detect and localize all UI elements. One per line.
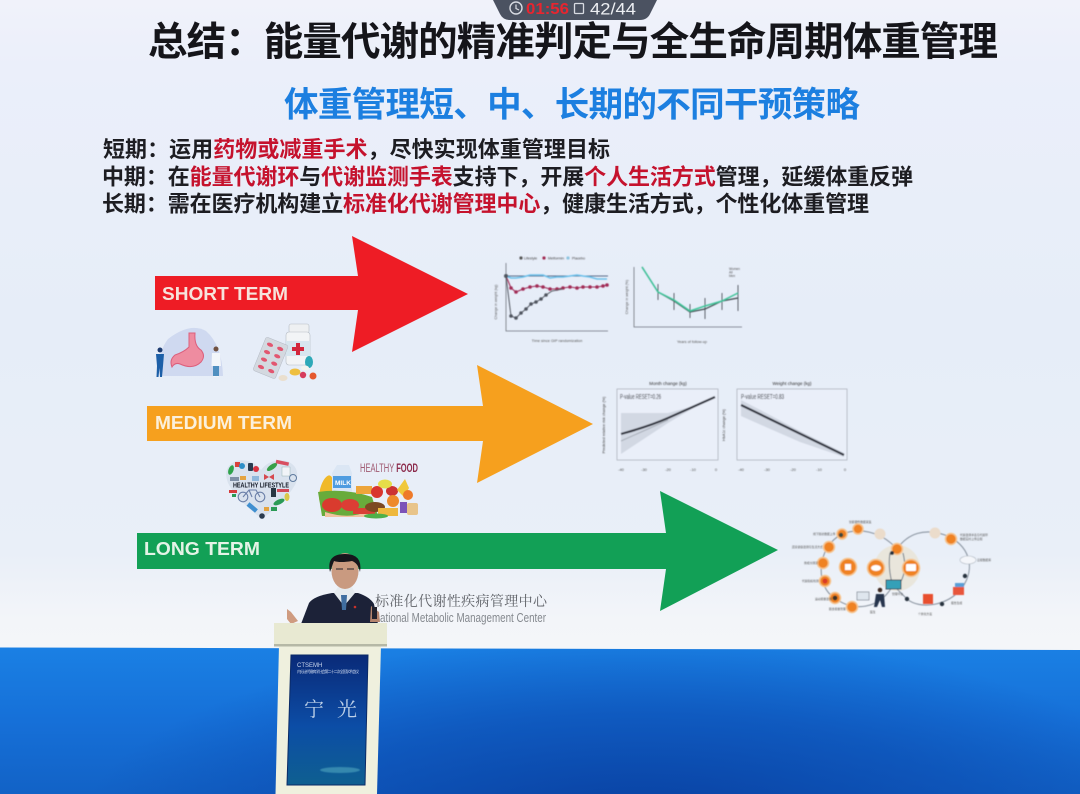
chart: body mass RESET plot: -40 (618, 467, 625, 472)
diagram: metabolic management cycle: 运动能量监测 (815, 597, 832, 601)
diagram: metabolic management cycle: 医生 (870, 610, 876, 614)
podium screen: CTSEMH (297, 663, 322, 669)
chart: body mass RESET plot: -10 (690, 467, 697, 472)
icon: healthy lifestyle heart (226, 460, 297, 519)
chart: short term weight change time series: Lifestyle (524, 256, 537, 260)
chart: long-term weight change by year: Men (729, 274, 735, 278)
diagram: metabolic management cycle: 个体化方案 (918, 612, 932, 616)
chart: short term weight change time series: Time since GIP randomization (532, 339, 582, 343)
center logo text (375, 591, 548, 625)
arrow: short term: SHORT TERM (162, 284, 288, 304)
chart: weight change RESET plot: HbA1c change (%) (722, 408, 726, 441)
diagram: metabolic management cycle: 代谢指标检测 (802, 579, 819, 583)
diagram: metabolic management cycle: 代谢监测手表与代谢环 (960, 533, 988, 537)
chart: short term weight change time series: Placebo (572, 256, 585, 260)
diagram: metabolic management cycle: 数据实时上传云端 (960, 537, 983, 541)
timer bar (493, 0, 657, 20)
chart: body mass RESET plot: Predicted relative risk change (%) (602, 396, 606, 453)
timer bar: 42/44 (590, 0, 636, 18)
icon: medicine bottle and pills (253, 324, 316, 381)
diagram: metabolic management cycle: 管理平台 (892, 592, 903, 596)
diagram: metabolic management cycle: 居家健康监测与生活方式 (792, 545, 823, 549)
arrow: medium term (147, 365, 593, 483)
chart: body mass RESET plot: P-value RESET=0.26 (620, 392, 661, 401)
arrow: medium term: MEDIUM TERM (155, 413, 292, 433)
icon: stomach surgery (156, 328, 223, 377)
podium screen: 光 (337, 693, 357, 722)
chart: body mass RESET plot: 0 (715, 467, 718, 472)
chart: body mass RESET plot: -20 (665, 467, 672, 472)
icon: healthy food: MILK (335, 480, 351, 487)
chart: long-term weight change by year: All (729, 270, 733, 274)
podium (274, 623, 387, 794)
icon: healthy food (316, 463, 418, 518)
speaker (287, 553, 380, 624)
chart: weight change RESET plot: -10 (816, 467, 823, 472)
chart: body mass RESET plot: Month change (kg) (649, 381, 687, 386)
diagram: metabolic management cycle: 报告生成 (951, 601, 962, 605)
chart: body mass RESET plot: -30 (641, 467, 648, 472)
center logo text: 标准化代谢性疾病管理中心 (375, 591, 548, 611)
chart: short term weight change time series: Change in weight (kg) (494, 285, 498, 319)
arrow: short term (155, 236, 468, 352)
strategy text block (102, 137, 913, 216)
blue stage band (0, 648, 1080, 794)
icon: healthy food: HEALTHY FOOD (360, 463, 418, 475)
chart: short term weight change time series: Metformin (548, 256, 564, 260)
chart: long-term weight change by year: Change in weight (%) (625, 280, 629, 314)
diagram: metabolic management cycle: 线下随访数据上传 (813, 532, 836, 536)
chart: weight change RESET plot: Weight change (kg) (773, 381, 812, 386)
chart: long-term weight change by year (625, 267, 742, 344)
diagram: metabolic management cycle: 云端数据库 (977, 558, 991, 562)
chart: weight change RESET plot: 0 (844, 467, 847, 472)
timer bar: 01:56 (526, 1, 569, 18)
chart: weight change RESET plot (722, 381, 847, 472)
chart: long-term weight change by year: Women (729, 267, 740, 271)
podium screen: 宁 (304, 693, 324, 722)
chart: long-term weight change by year: Years of follow-up (677, 340, 707, 344)
medium term strategy: 中期：在能量代谢环与代谢监测手表支持下，开展个人生活方式管理，延缓体重反弹 (102, 164, 913, 190)
diagram: metabolic management cycle: 智能硬件数据采集 (849, 520, 872, 524)
title: 总结：能量代谢的精准判定与全生命周期体重管理 (148, 20, 998, 64)
podium screen (287, 655, 368, 785)
chart: weight change RESET plot: -30 (764, 467, 771, 472)
chart: weight change RESET plot: P-value RESET=0.83 (741, 392, 784, 401)
arrow: long term (137, 491, 778, 611)
center logo text: ational Metabolic Management Center (380, 611, 546, 625)
short term strategy: 短期：运用药物或减重手术，尽快实现体重管理目标 (103, 137, 610, 162)
subtitle: 体重管理短、中、长期的不同干预策略 (284, 86, 860, 124)
arrow: long term: LONG TERM (144, 539, 260, 559)
podium screen: 内分泌代谢病学分会第二十二次全国学术会议 (297, 668, 359, 674)
long term strategy: 长期：需在医疗机构建立标准化代谢管理中心，健康生活方式，个性化体重管理 (102, 192, 869, 216)
chart: short term weight change time series (494, 256, 609, 343)
icon: healthy lifestyle heart: HEALTHY LIFESTYLE (233, 482, 289, 490)
chart: weight change RESET plot: -40 (738, 467, 745, 472)
diagram: metabolic management cycle: 体成分测定 (804, 561, 818, 565)
diagram: metabolic management cycle: 膳食能量管理 (829, 607, 846, 611)
diagram: metabolic management cycle (792, 520, 991, 616)
chart: body mass RESET plot (602, 381, 718, 472)
chart: weight change RESET plot: -20 (790, 467, 797, 472)
